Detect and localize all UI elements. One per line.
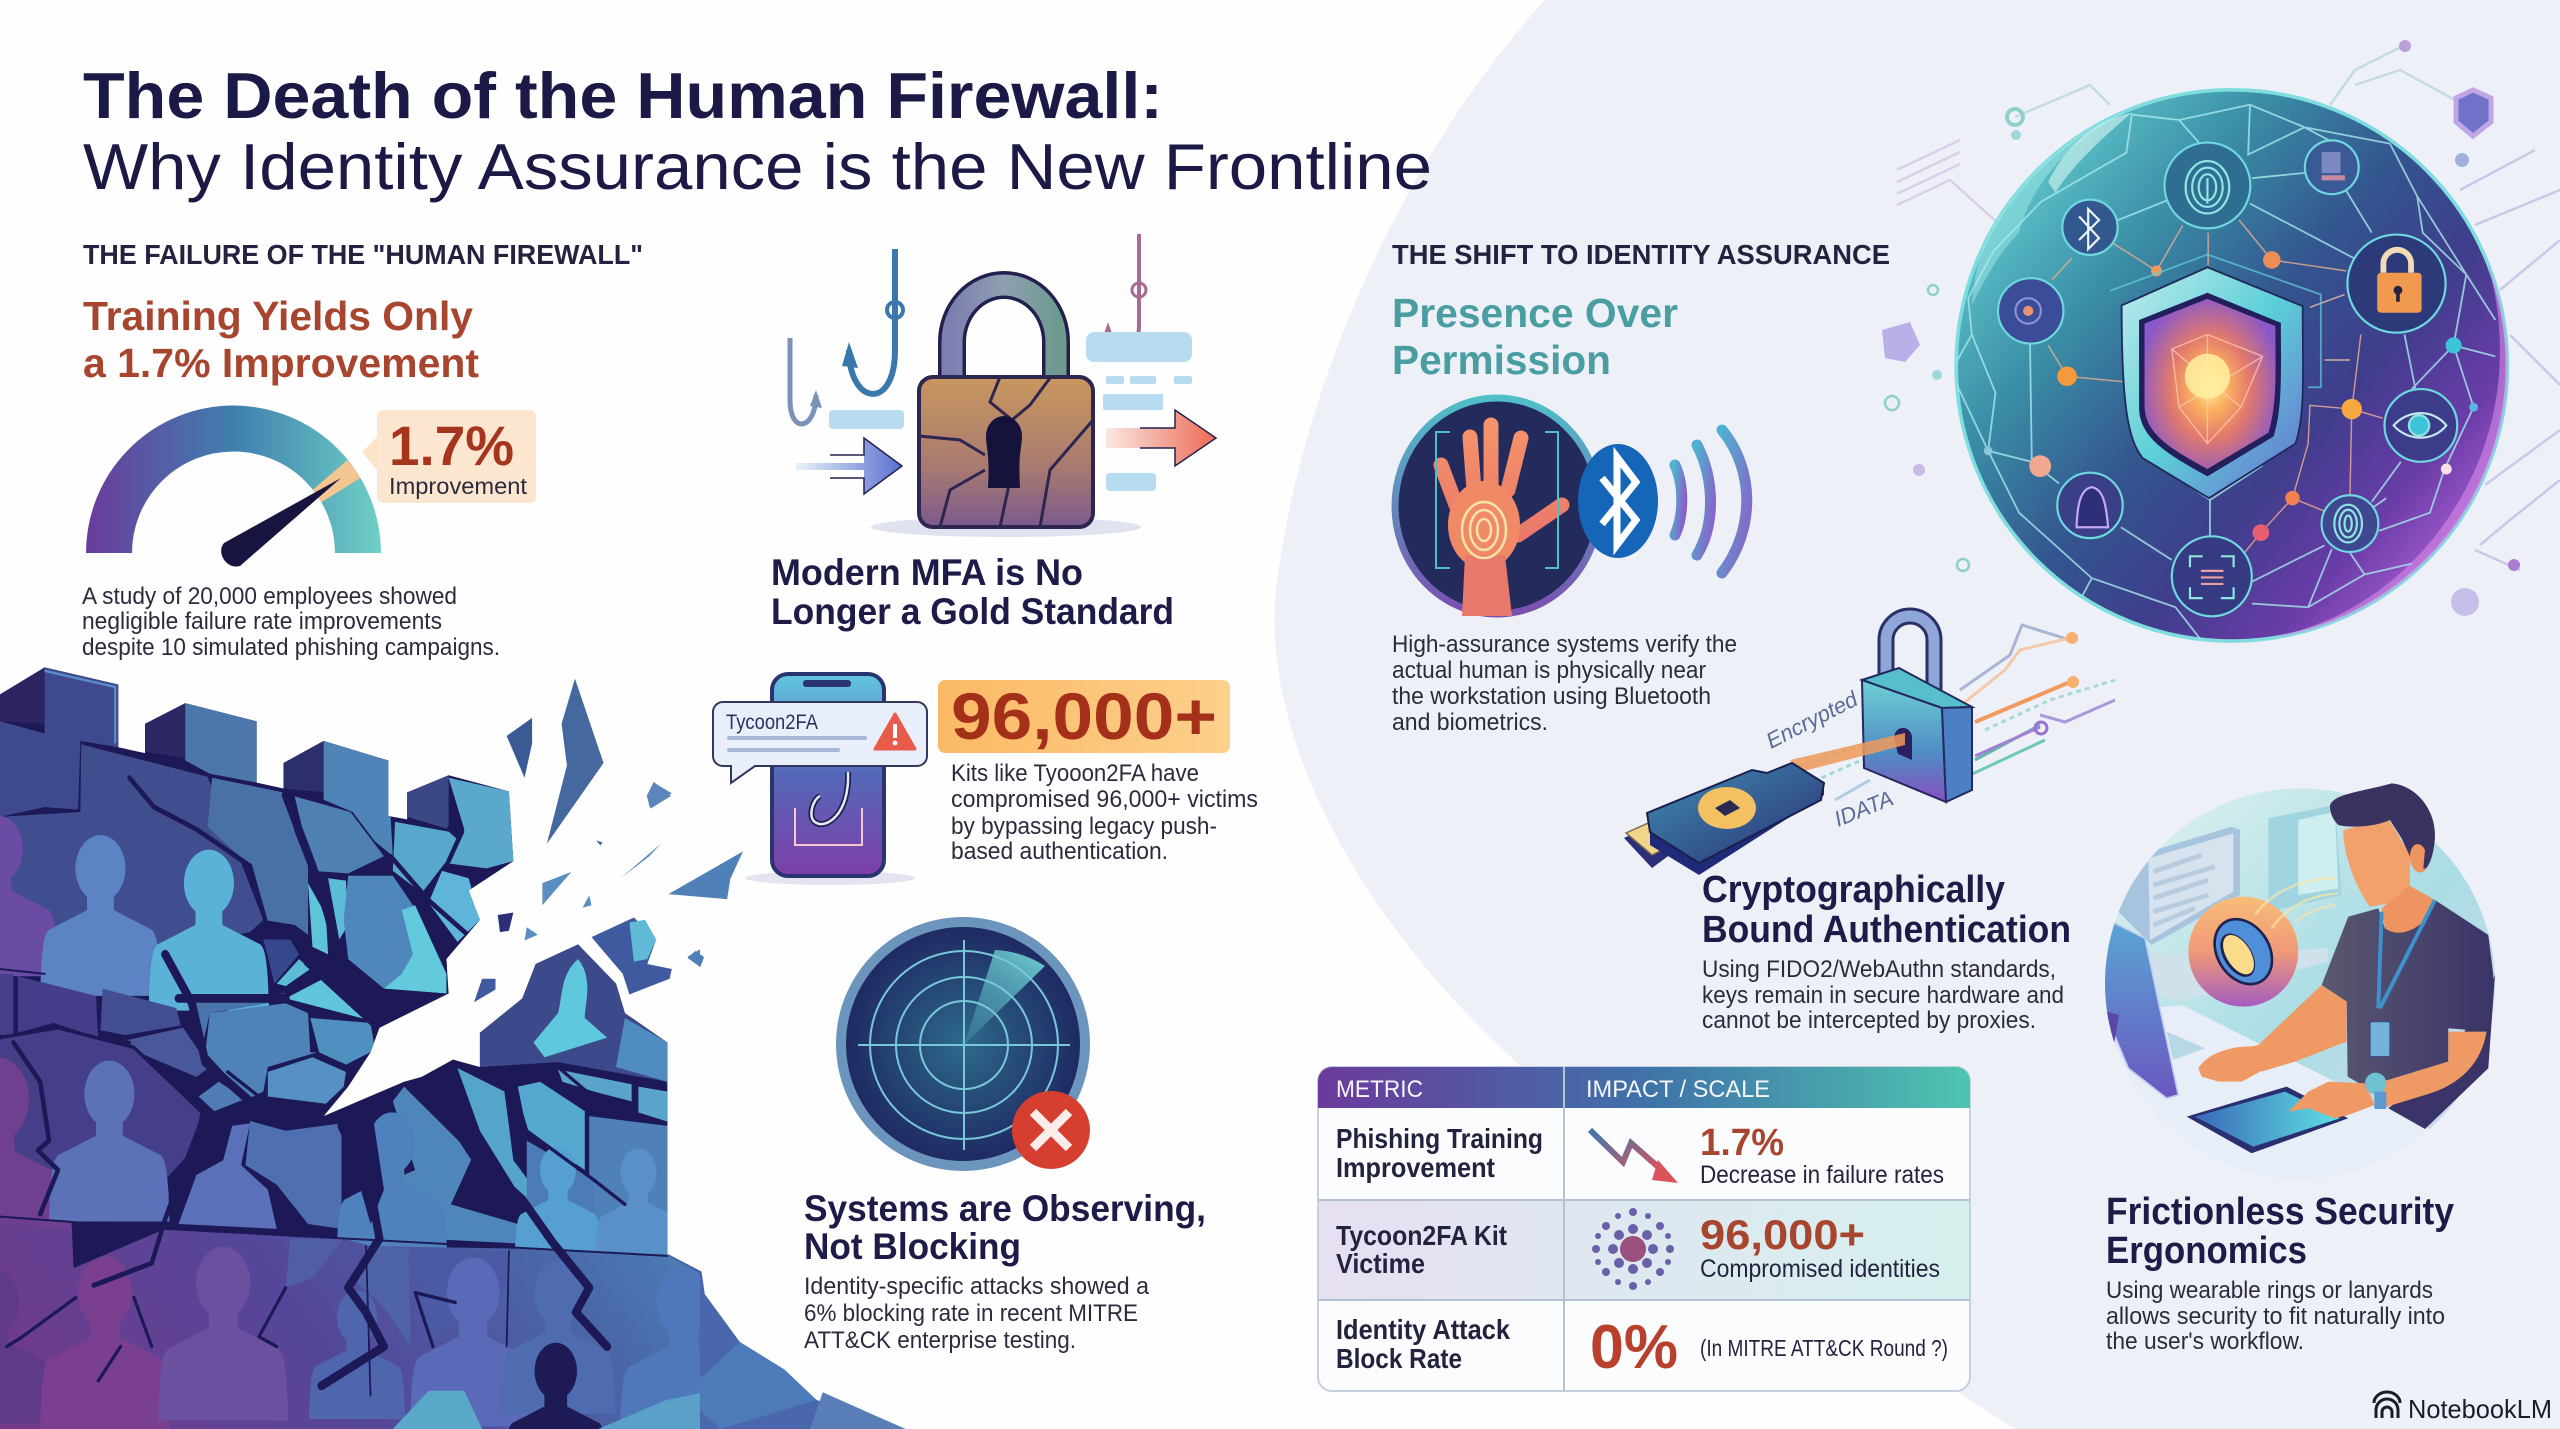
table header bbox=[1318, 1067, 1970, 1108]
table row: tycoon background bbox=[1319, 1200, 1969, 1300]
text: FIDO2 standards: keys remain in secure hardware and bbox=[1702, 982, 2064, 1009]
icon: hand scan and bluetooth bbox=[1395, 398, 1747, 616]
section heading: failure of the human firewall: THE FAILURE OF THE "HUMAN FIREWALL" bbox=[83, 239, 643, 270]
text: study of 20,000 employees: despite 10 simulated phishing campaigns. bbox=[82, 634, 500, 661]
heading: training yields: Training Yields Only bbox=[83, 293, 473, 339]
text: kits like Tyooon2FA bbox=[951, 760, 1258, 865]
text: kits like Tyooon2FA: Kits like Tyooon2FA have bbox=[951, 760, 1199, 787]
row: identity attack: Identity Attack bbox=[1336, 1314, 1510, 1345]
text: FIDO2 standards bbox=[1702, 956, 2064, 1034]
ring bbox=[2201, 907, 2286, 997]
second row of people bbox=[0, 1057, 682, 1264]
title bbox=[83, 59, 1432, 203]
heading: systems are observing: Not Blocking bbox=[804, 1226, 1021, 1267]
text: kits like Tyooon2FA: compromised 96,000+ victims bbox=[951, 786, 1258, 813]
table body bbox=[1318, 1067, 1970, 1391]
text: study of 20,000 employees bbox=[82, 583, 500, 661]
row: tycoon2fa bbox=[1336, 1208, 1940, 1290]
text: kits like Tyooon2FA: by bypassing legacy push- bbox=[951, 813, 1217, 840]
text: high-assurance systems: the workstation using Bluetooth bbox=[1392, 683, 1711, 710]
mesh lines bbox=[1955, 105, 2495, 649]
illustration: protective sphere with shield bbox=[1955, 90, 2510, 649]
row: identity attack: Block Rate bbox=[1336, 1343, 1462, 1374]
illustration: cracked padlock and phishing hooks bbox=[790, 234, 1216, 537]
heading: frictionless security: Frictionless Security bbox=[2106, 1191, 2454, 1233]
floating shards bbox=[474, 679, 700, 1002]
heading: training yields bbox=[83, 293, 479, 386]
row: tycoon2fa: Tycoon2FA Kit bbox=[1336, 1220, 1507, 1251]
text: study of 20,000 employees: A study of 20,000 employees showed bbox=[82, 583, 457, 610]
text: FIDO2 standards: cannot be intercepted by proxies. bbox=[1702, 1007, 2036, 1034]
illustration: radar with blocked mark bbox=[836, 917, 1090, 1171]
heading: modern MFA bbox=[771, 552, 1174, 632]
heading: cryptographically bound bbox=[1702, 869, 2071, 951]
icon: gold lock in sphere bbox=[2377, 250, 2422, 313]
row: phishing training: Improvement bbox=[1336, 1152, 1495, 1183]
middle wall stones bbox=[0, 944, 667, 1256]
ring glow bbox=[2188, 897, 2298, 1007]
row: tycoon2fa: 96,000+ bbox=[1700, 1211, 1865, 1258]
metric table bbox=[1318, 1067, 1970, 1391]
gauge chart bbox=[109, 429, 358, 567]
node glyphs bbox=[2015, 161, 2446, 598]
heading: modern MFA: Longer a Gold Standard bbox=[771, 591, 1174, 632]
dark voids in main fracture bbox=[304, 959, 480, 1224]
section heading: shift to identity assurance: THE SHIFT TO IDENTITY ASSURANCE bbox=[1392, 239, 1890, 270]
text: wearable rings: Using wearable rings or lanyards bbox=[2106, 1277, 2433, 1304]
small padlock bbox=[1886, 616, 1934, 705]
person bbox=[2187, 783, 2495, 1153]
text: wearable rings bbox=[2106, 1277, 2445, 1355]
heading: cryptographically bound: Bound Authentication bbox=[1702, 909, 2071, 951]
illustration: person with wearable ring at workstation bbox=[2095, 783, 2495, 1192]
text: high-assurance systems: High-assurance systems verify the bbox=[1392, 631, 1737, 658]
row: phishing training: Phishing Training bbox=[1336, 1123, 1543, 1154]
text: kits like Tyooon2FA: based authentication. bbox=[951, 838, 1168, 865]
callout: 1.7% improvement: Improvement bbox=[389, 473, 528, 499]
data streams bbox=[1790, 625, 2115, 800]
text: wearable rings: allows security to fit naturally into bbox=[2106, 1303, 2445, 1330]
first row of people bbox=[0, 815, 269, 1011]
text: identity-specific attacks: 6% blocking rate in recent MITRE bbox=[804, 1300, 1138, 1327]
heading: modern MFA: Modern MFA is No bbox=[771, 552, 1083, 593]
small floating dots bbox=[1882, 40, 2520, 616]
USB security key bbox=[1624, 824, 1683, 868]
heading: presence over permission bbox=[1392, 290, 1678, 383]
small shield icon bbox=[2456, 90, 2491, 136]
heading: systems are observing bbox=[804, 1188, 1206, 1267]
text: high-assurance systems: actual human is physically near bbox=[1392, 657, 1706, 684]
upper wall stones bbox=[0, 667, 513, 993]
row: identity attack: 0% bbox=[1590, 1313, 1678, 1382]
stat badge: 96,000+: 96,000+ bbox=[951, 679, 1217, 753]
heading: frictionless security: Ergonomics bbox=[2106, 1230, 2307, 1272]
icon nodes bbox=[1998, 140, 2457, 616]
row: identity attack bbox=[1336, 1313, 1948, 1382]
heading: systems are observing: Systems are Observing, bbox=[804, 1188, 1206, 1229]
shield bbox=[2110, 255, 2321, 498]
row: phishing training: 1.7% bbox=[1700, 1122, 1784, 1164]
wall silhouette bbox=[0, 667, 700, 1429]
text: high-assurance systems bbox=[1392, 631, 1737, 736]
heading: frictionless security bbox=[2106, 1191, 2454, 1272]
illustration: phone with Tycoon2FA alert: Tycoon2FA bbox=[726, 711, 818, 734]
heading: cryptographically bound: Cryptographically bbox=[1702, 869, 2005, 911]
table header: METRIC bbox=[1336, 1076, 1423, 1103]
third row of people bbox=[0, 1247, 746, 1429]
illustration: phone with Tycoon2FA alert bbox=[713, 674, 927, 885]
text: study of 20,000 employees: negligible failure rate improvements bbox=[82, 608, 442, 635]
row: phishing training bbox=[1336, 1122, 1944, 1189]
text: FIDO2 standards: Using FIDO2/WebAuthn standards, bbox=[1702, 956, 2056, 983]
callout: 1.7% improvement: 1.7% bbox=[389, 414, 514, 477]
table header: IMPACT / SCALE bbox=[1586, 1076, 1770, 1103]
illustration: rubble and shards beyond the wall bbox=[638, 782, 906, 1429]
text: identity-specific attacks: Identity-specific attacks showed a bbox=[804, 1273, 1150, 1300]
lower wall band bbox=[0, 1224, 700, 1429]
circuit decoration around sphere bbox=[1885, 45, 2560, 571]
title: Why Identity Assurance is the New Frontline bbox=[83, 130, 1432, 203]
label: iDATA: IDATA bbox=[1831, 785, 1897, 832]
row: phishing training: Decrease in failure rates bbox=[1700, 1161, 1944, 1189]
text: high-assurance systems: and biometrics. bbox=[1392, 709, 1548, 736]
text: identity-specific attacks: ATT&CK enterprise testing. bbox=[804, 1327, 1076, 1354]
glowing nodes bbox=[1984, 251, 2478, 541]
text: identity-specific attacks bbox=[804, 1273, 1150, 1354]
row: tycoon2fa: Compromised identities bbox=[1700, 1255, 1940, 1283]
cracks bbox=[0, 778, 667, 1396]
illustration: encrypted hardware key and padlock bbox=[1624, 616, 2115, 875]
heading: training yields: a 1.7% Improvement bbox=[83, 340, 479, 386]
title: The Death of the Human Firewall: bbox=[83, 59, 1163, 132]
heading: presence over permission: Presence Over bbox=[1392, 290, 1678, 336]
illustration: crumbling wall of people bbox=[0, 667, 746, 1429]
background: curved identity-assurance panel bbox=[1275, 0, 2560, 1429]
row: tycoon2fa: Victime bbox=[1336, 1248, 1425, 1279]
text: wearable rings: the user's workflow. bbox=[2106, 1328, 2304, 1355]
row: identity attack: (In MITRE ATT&CK Round ?) bbox=[1700, 1335, 1948, 1361]
label: Encrypted: Encrypted bbox=[1762, 686, 1862, 753]
heading: presence over permission: Permission bbox=[1392, 337, 1611, 383]
callout: 1.7% improvement bbox=[362, 410, 536, 503]
NotebookLM logo: NotebookLM bbox=[2408, 1394, 2552, 1424]
